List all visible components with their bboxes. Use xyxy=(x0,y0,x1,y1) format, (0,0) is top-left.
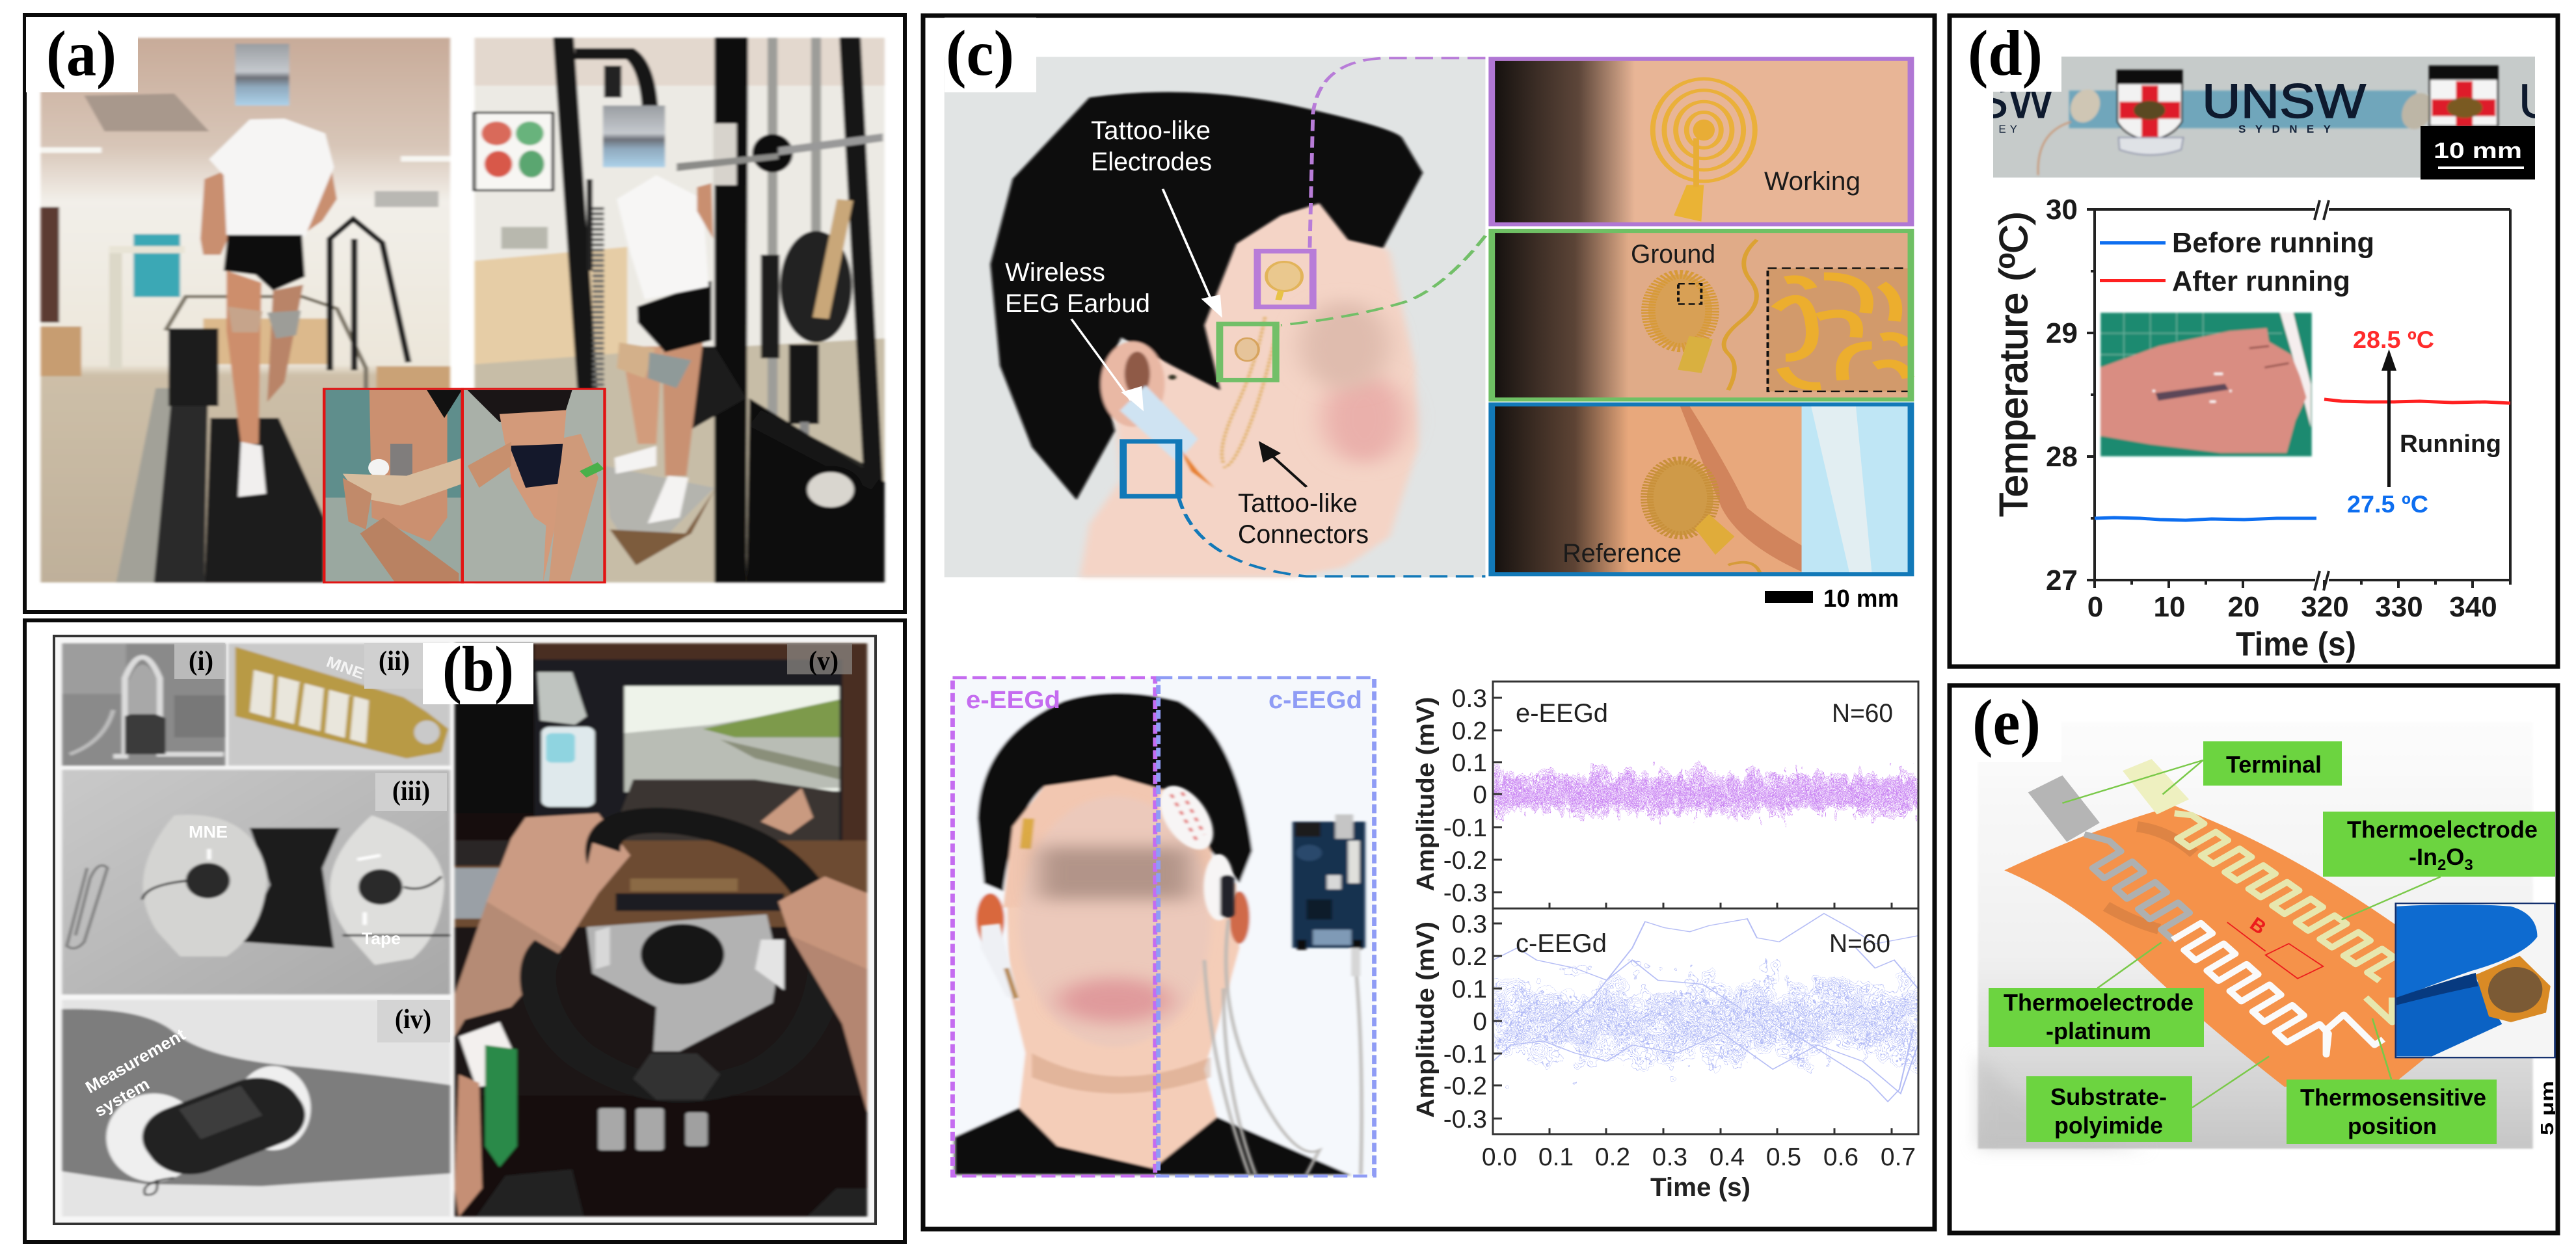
chart: c-EEGd amplitude: 0.3 xyxy=(1452,910,1487,938)
callout: Thermoelectrode In2O3 xyxy=(2323,812,2555,877)
text: Ground: Ground xyxy=(1631,240,1715,269)
chart: temperature before and after running: 20 xyxy=(2228,591,2259,623)
clipped scale text: 5 μm xyxy=(2537,1081,2557,1135)
text: MNE and Tape annotations: MNE xyxy=(324,653,367,683)
callout: Substrate polyimide: Substrate- xyxy=(2050,1083,2167,1110)
chart: e-EEGd amplitude xyxy=(1412,682,1929,908)
panel label c: (c) xyxy=(946,17,1014,89)
head photo labels: Tattoo-like xyxy=(1091,116,1211,145)
chart: c-EEGd amplitude: 0.5 xyxy=(1766,1143,1801,1171)
dashed connector: green xyxy=(1281,235,1485,325)
photo: UNSW strip sensor: EY xyxy=(1998,123,2021,135)
photo: UNSW strip sensor: SYDNEY xyxy=(2238,123,2331,135)
chart: c-EEGd amplitude: c-EEGd xyxy=(1516,929,1607,958)
chart: temperature before and after running: Time (s) xyxy=(2236,626,2356,663)
photo: UNSW strip sensor xyxy=(1976,57,2553,179)
photo iv: measurement system on forearm xyxy=(62,1000,450,1217)
value 28.5 C: 28.5 ºC xyxy=(2353,326,2434,353)
arrow: running increase xyxy=(2381,349,2396,487)
chart: c-EEGd amplitude: 0.4 xyxy=(1710,1143,1745,1171)
chart: e-EEGd amplitude: 0.3 xyxy=(1452,685,1487,713)
inset: ground electrode xyxy=(1492,231,1911,399)
panel label b: (b) xyxy=(442,633,514,705)
value 27.5 C: 27.5 ºC xyxy=(2347,491,2428,518)
text: MNE and Tape annotations: MNE xyxy=(189,822,228,842)
callout: Terminal xyxy=(2203,741,2342,786)
chart: c-EEGd amplitude: 0 xyxy=(1473,1008,1487,1036)
chart: c-EEGd amplitude: Time (s) xyxy=(1650,1173,1751,1202)
text: Working: Working xyxy=(1764,167,1860,196)
chart: e-EEGd amplitude: -0.1 xyxy=(1443,814,1487,842)
head photo labels: Electrodes xyxy=(1091,148,1212,176)
panel label e: (e) xyxy=(1972,686,2041,758)
chart: c-EEGd amplitude: 0.2 xyxy=(1452,943,1487,971)
scale box: 10 mm xyxy=(2421,126,2535,179)
legend xyxy=(2100,227,2374,297)
chart: e-EEGd amplitude: N=60 xyxy=(1832,699,1893,728)
callout: Thermosensitive position: position xyxy=(2348,1113,2437,1139)
callout: Thermosensitive position: Thermosensitive xyxy=(2300,1084,2486,1111)
chart: temperature before and after running: 0 xyxy=(2087,591,2103,623)
photo: frontal face comparing e-EEGd and c-EEGd xyxy=(952,678,1375,1177)
chart: c-EEGd amplitude: N=60 xyxy=(1829,929,1890,958)
arrow: to earbud xyxy=(1071,319,1144,411)
text: Reference: Reference xyxy=(1563,539,1682,568)
chart: e-EEGd amplitude: 0.1 xyxy=(1452,749,1487,777)
sub-figure labels i to v: (ii) xyxy=(379,646,410,676)
scale bar 10 mm: 10 mm xyxy=(1823,585,1899,613)
text: e-EEGd heading: e-EEGd xyxy=(966,687,1060,714)
chart: c-EEGd amplitude: 0.1 xyxy=(1538,1143,1574,1171)
head photo labels: Connectors xyxy=(1238,520,1369,549)
In2O3 serpentine xyxy=(2175,814,2394,981)
text: c-EEGd heading: c-EEGd xyxy=(1268,687,1362,714)
inset: reference electrode xyxy=(1492,404,1911,574)
photo: head profile with electrodes xyxy=(945,57,1485,577)
head photo labels: Tattoo-like xyxy=(1238,489,1358,518)
e-EEGd dashed outline xyxy=(952,678,1155,1176)
chart: c-EEGd amplitude: Amplitude (mV) xyxy=(1412,921,1440,1118)
panel e: thermocouple schematic xyxy=(1950,685,2558,1233)
chart: c-EEGd amplitude: 0.6 xyxy=(1823,1143,1858,1171)
c-EEGd dashed outline xyxy=(1159,678,1375,1176)
panel a: treadmill and gym photos xyxy=(25,15,905,612)
photo v: steering wheel and driving simulator xyxy=(455,643,867,1217)
photo ii: gold microneedle array xyxy=(228,643,450,765)
head photo labels xyxy=(1005,116,1369,549)
green selection box xyxy=(1220,324,1276,380)
chart: c-EEGd amplitude: -0.3 xyxy=(1443,1106,1487,1133)
legend: After running xyxy=(2172,265,2350,297)
callout: Thermoelectrode platinum: -platinum xyxy=(2046,1018,2151,1044)
photo: UNSW strip sensor: SW xyxy=(1976,74,2054,128)
sub-figure labels i to v: (i) xyxy=(189,646,213,676)
photo: squat in gym frame xyxy=(474,38,885,583)
scale box: 10 mm: 10 mm xyxy=(2434,139,2522,163)
chart: temperature before and after running: 27 xyxy=(2046,564,2078,596)
section B marker xyxy=(2227,922,2323,979)
chart: e-EEGd amplitude: Amplitude (mV) xyxy=(1412,697,1440,891)
sub-figure labels i to v xyxy=(174,643,852,1042)
blue selection box xyxy=(1123,442,1179,496)
chart: e-EEGd amplitude: -0.2 xyxy=(1443,847,1487,875)
callout: Substrate polyimide: polyimide xyxy=(2054,1112,2163,1139)
yellow terminal xyxy=(2123,759,2189,814)
text: MNE and Tape annotations xyxy=(82,653,401,1120)
head photo labels: EEG Earbud xyxy=(1005,289,1150,318)
chart: e-EEGd amplitude: 0.2 xyxy=(1452,717,1487,745)
chart: temperature before and after running: 28 xyxy=(2046,441,2078,473)
callout: Substrate polyimide xyxy=(2026,1076,2192,1142)
chart: temperature before and after running: 10 xyxy=(2154,591,2185,623)
scale bar 10 mm xyxy=(1765,585,1899,613)
chart: e-EEGd amplitude: e-EEGd xyxy=(1516,699,1608,728)
photo: UNSW strip sensor: UNSW xyxy=(2202,74,2366,128)
arrow: to tattoo electrodes xyxy=(1163,189,1222,318)
head photo labels: Wireless xyxy=(1005,258,1105,287)
blue trace xyxy=(2095,518,2316,520)
sub-figure labels i to v: (v) xyxy=(809,646,839,676)
text: MNE and Tape annotations: system xyxy=(91,1074,153,1120)
orange polyimide substrate xyxy=(2004,806,2430,1087)
text: Running: Running xyxy=(2400,431,2501,458)
sub-figure labels i to v: (iii) xyxy=(392,776,430,806)
chart: temperature before and after running: 29 xyxy=(2046,317,2078,349)
chart: e-EEGd amplitude: 0 xyxy=(1473,781,1487,809)
chart: c-EEGd amplitude xyxy=(1412,908,1929,1202)
hand inset photo xyxy=(2100,313,2312,457)
chart: c-EEGd amplitude: 0.2 xyxy=(1595,1143,1630,1171)
panel label a: (a) xyxy=(46,18,116,90)
chart: temperature before and after running: 320 xyxy=(2301,591,2349,623)
photo iii: MNE with tape xyxy=(62,770,450,994)
panel c: tattoo EEG electrodes xyxy=(923,16,1935,1229)
callout: Terminal: Terminal xyxy=(2226,751,2322,778)
chart: c-EEGd amplitude: 0.7 xyxy=(1881,1143,1916,1171)
panel label d: (d) xyxy=(1968,17,2043,89)
red trace xyxy=(2324,399,2510,403)
platinum serpentine: grey section xyxy=(2084,834,2190,940)
callout: Thermoelectrode platinum xyxy=(1989,988,2204,1047)
callout: Thermoelectrode In2O3: O xyxy=(2446,843,2464,870)
plot frame and axes xyxy=(2087,200,2510,590)
chart: temperature before and after running: 340 xyxy=(2449,591,2497,623)
callout: Thermoelectrode In2O3: -In xyxy=(2409,843,2437,870)
photo: UNSW strip sensor: U xyxy=(2519,74,2553,128)
chart: temperature before and after running: 30 xyxy=(2046,194,2078,226)
callout: Thermosensitive position xyxy=(2287,1080,2497,1144)
inner frame xyxy=(54,636,876,1224)
text: MNE and Tape annotations: Measurement xyxy=(82,1024,189,1097)
sub-figure labels i to v: (iv) xyxy=(395,1005,431,1035)
chart: c-EEGd amplitude: -0.1 xyxy=(1443,1040,1487,1068)
chart: temperature before and after running: 330 xyxy=(2375,591,2423,623)
callout: Thermoelectrode platinum: Thermoelectrode xyxy=(2004,989,2194,1016)
inset photos: sensor application on thigh xyxy=(324,389,605,583)
platinum serpentine: white section xyxy=(2173,923,2383,1055)
callout: Thermoelectrode In2O3: Thermoelectrode xyxy=(2347,816,2538,843)
chart: temperature before and after running: Temperature (ºC) xyxy=(1992,211,2035,517)
schematic background and substrate xyxy=(1978,722,2555,1148)
purple selection box xyxy=(1257,251,1313,307)
leader lines xyxy=(2062,760,2441,1107)
inset: working electrode xyxy=(1492,59,1911,224)
callout: Thermoelectrode In2O3: 3 xyxy=(2464,856,2473,874)
legend: Before running xyxy=(2172,227,2374,259)
panel d: temperature sensor xyxy=(1950,16,2558,667)
grey terminal xyxy=(2028,775,2100,842)
text: MNE and Tape annotations: Tape xyxy=(362,929,401,948)
chart: c-EEGd amplitude: 0.3 xyxy=(1652,1143,1687,1171)
panel label a xyxy=(26,17,138,92)
chart: temperature before and after running xyxy=(1992,194,2510,663)
arrow: to connectors xyxy=(1259,441,1306,487)
inset: flexible sensor on gloved fingers xyxy=(2396,903,2555,1057)
text: section B: B xyxy=(2246,913,2270,939)
dashed connector: blue xyxy=(1179,498,1485,576)
photo i: microneedle SEM xyxy=(62,643,225,765)
chart: c-EEGd amplitude: 0.0 xyxy=(1482,1143,1517,1171)
chart: c-EEGd amplitude: 0.1 xyxy=(1452,975,1487,1003)
dashed connector: purple xyxy=(1309,58,1485,248)
photo: runner on treadmill xyxy=(41,38,450,583)
callout: Thermoelectrode In2O3: 2 xyxy=(2437,856,2446,874)
chart: e-EEGd amplitude: -0.3 xyxy=(1443,879,1487,907)
chart: c-EEGd amplitude: -0.2 xyxy=(1443,1072,1487,1100)
panel b: microneedle electrode and driving simulator xyxy=(25,620,905,1242)
